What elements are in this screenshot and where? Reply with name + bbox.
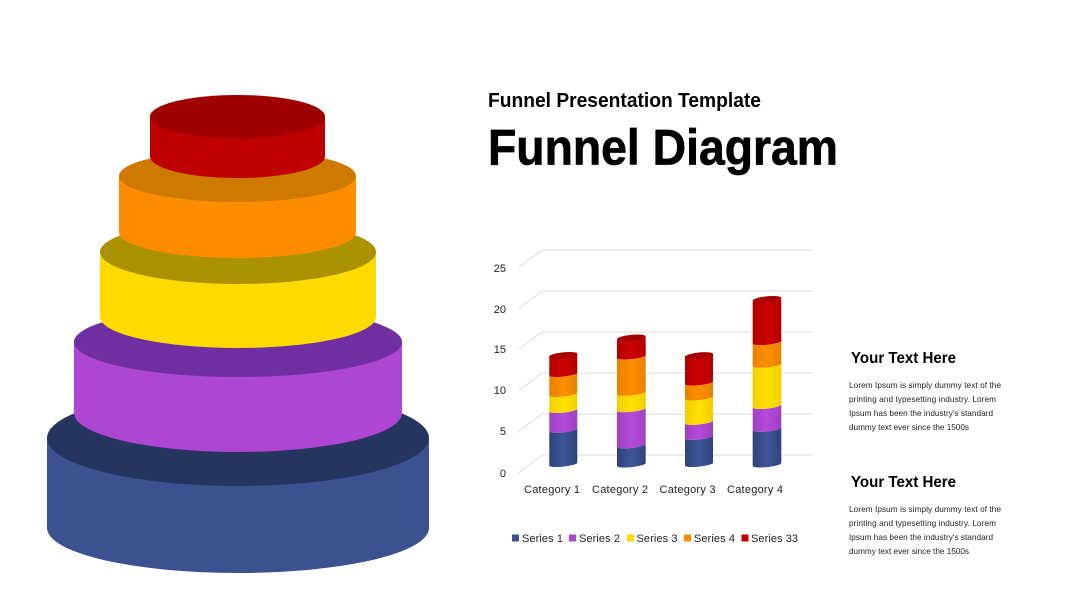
y axis labels: 5 [500, 426, 506, 438]
legend: Series 4 [694, 533, 735, 545]
tier: navy base [47, 390, 429, 573]
legend: Series 2 [579, 533, 620, 545]
y axis labels: 25 [494, 263, 506, 275]
bar: category 2 [617, 333, 646, 468]
x axis labels [524, 484, 783, 496]
y axis labels: 10 [494, 385, 506, 397]
paragraph 1: printing and typesetting industry. Lorem [849, 395, 996, 404]
legend [512, 533, 798, 545]
text block 2 [849, 474, 1001, 556]
subtitle: Funnel Presentation Template [488, 90, 761, 112]
paragraph 1 [849, 381, 1001, 432]
3D stacked bar chart [494, 250, 813, 545]
title: Funnel Diagram [488, 120, 838, 176]
paragraph 2 [849, 505, 1001, 556]
x axis labels: Category 4 [727, 484, 783, 496]
legend: Series 3 [636, 533, 678, 545]
tier: yellow [100, 220, 376, 348]
paragraph 1: Lorem Ipsum is simply dummy text of the [849, 381, 1001, 390]
tier: orange [119, 150, 356, 258]
heading 2: Your Text Here [851, 474, 956, 491]
x axis labels: Category 1 [524, 484, 580, 496]
x axis labels: Category 3 [660, 484, 716, 496]
paragraph 2: Ipsum has been the industry's standard [849, 533, 993, 542]
legend: Series 1 [522, 533, 563, 545]
paragraph 2: dummy text ever since the 1500s [849, 547, 969, 556]
bar: category 4 [752, 295, 782, 468]
x axis labels: Category 2 [592, 484, 648, 496]
paragraph 2: printing and typesetting industry. Lorem [849, 519, 996, 528]
legend: Series 33 [751, 533, 798, 545]
tier: red top [150, 95, 325, 178]
y axis labels [494, 263, 506, 480]
bar: category 1 [549, 351, 578, 467]
grid lines [518, 250, 813, 473]
y axis labels: 0 [500, 468, 506, 480]
heading 1: Your Text Here [851, 350, 956, 367]
y axis labels: 15 [494, 344, 506, 356]
y axis labels: 20 [494, 304, 506, 316]
paragraph 1: Ipsum has been the industry's standard [849, 409, 993, 418]
stacked cylinder funnel [47, 95, 429, 573]
paragraph 2: Lorem Ipsum is simply dummy text of the [849, 505, 1001, 514]
paragraph 1: dummy text ever since the 1500s [849, 423, 969, 432]
bar: category 3 [684, 351, 714, 467]
tier: purple [74, 307, 402, 452]
text block 1 [849, 350, 1001, 432]
